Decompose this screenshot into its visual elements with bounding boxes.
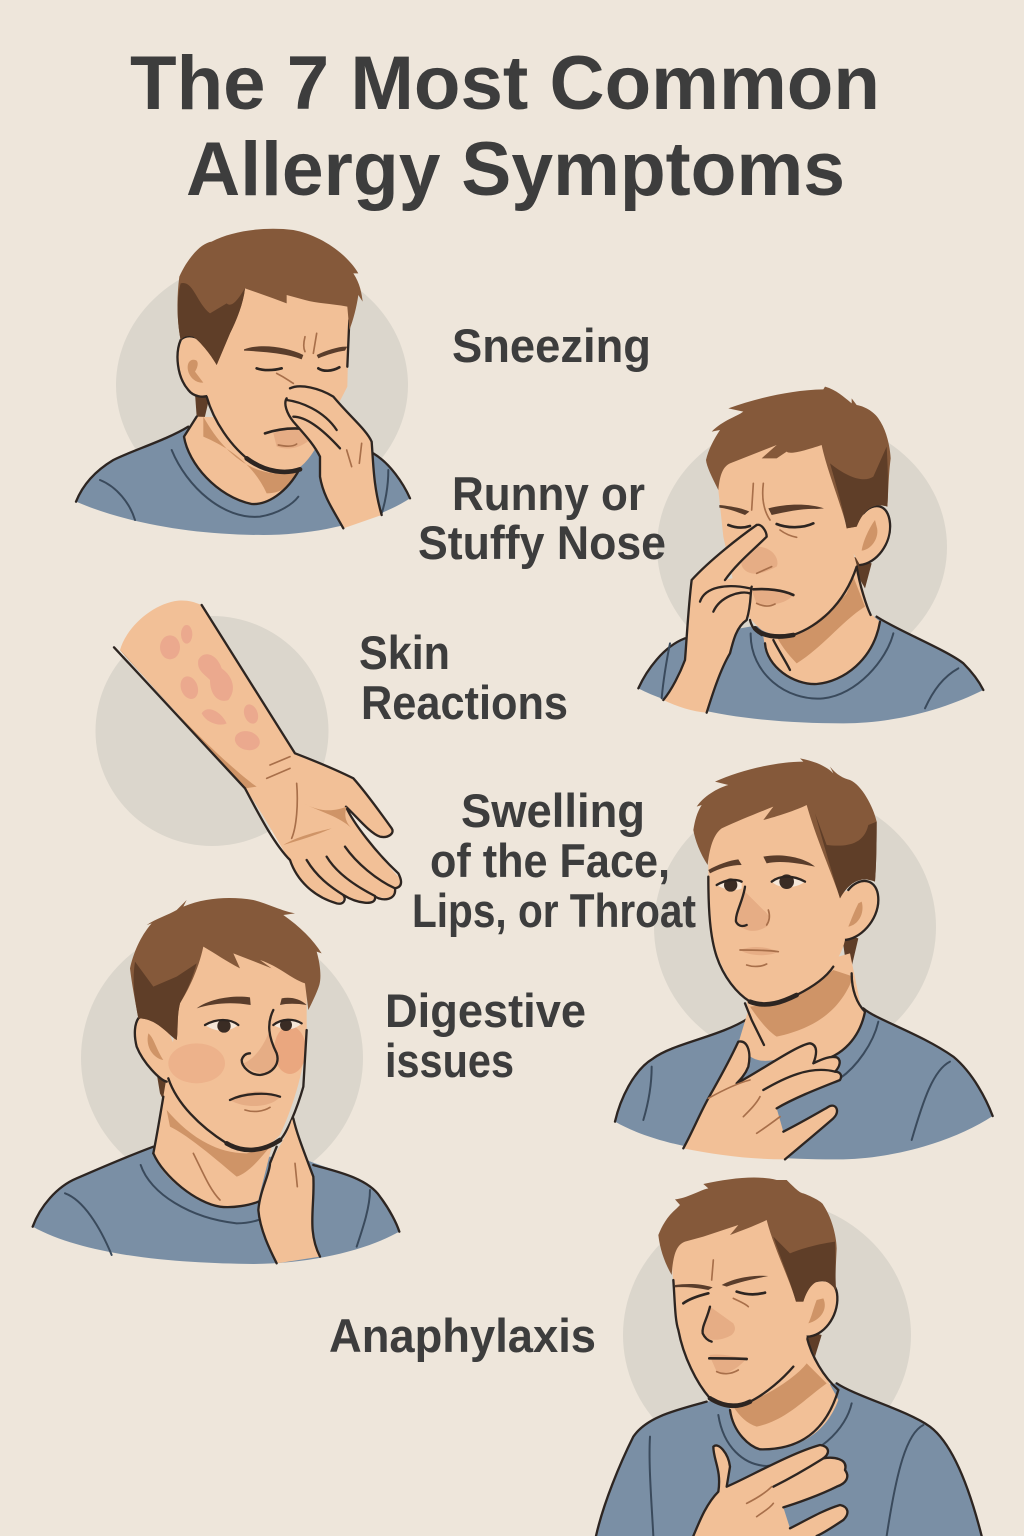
rash patches — [160, 625, 262, 753]
figure: arm with rash — [96, 601, 401, 904]
title: Allergy Symptoms — [186, 127, 845, 212]
title: The 7 Most Common — [130, 41, 880, 126]
label: Swelling of the Face, Lips, or Throat: Swelling — [461, 784, 645, 837]
figure: man with anaphylaxis — [596, 1178, 982, 1536]
label: Swelling of the Face, Lips, or Throat — [412, 784, 696, 937]
label: Swelling of the Face, Lips, or Throat: of the Face, — [430, 834, 670, 887]
label: Anaphylaxis: Anaphylaxis — [329, 1309, 596, 1362]
label: Digestive issues: issues — [385, 1034, 514, 1087]
figure: sneezing man — [76, 229, 410, 535]
label: Digestive issues — [385, 984, 586, 1087]
label: Skin Reactions: Skin — [359, 626, 450, 679]
label: Runny or Stuffy Nose: Runny or — [452, 467, 645, 520]
label: Runny or Stuffy Nose — [418, 467, 666, 569]
label: Swelling of the Face, Lips, or Throat: Lips, or Throat — [412, 884, 696, 937]
figure: man pinching nose — [638, 387, 983, 723]
label: Skin Reactions — [359, 626, 568, 729]
label: Digestive issues: Digestive — [385, 984, 586, 1037]
figure: man with stomach discomfort — [33, 898, 399, 1264]
label: Sneezing: Sneezing — [452, 319, 651, 372]
label: Runny or Stuffy Nose: Stuffy Nose — [418, 516, 666, 569]
figure: man with swollen throat — [615, 758, 993, 1159]
label: Skin Reactions: Reactions — [361, 676, 568, 729]
title — [130, 41, 880, 212]
